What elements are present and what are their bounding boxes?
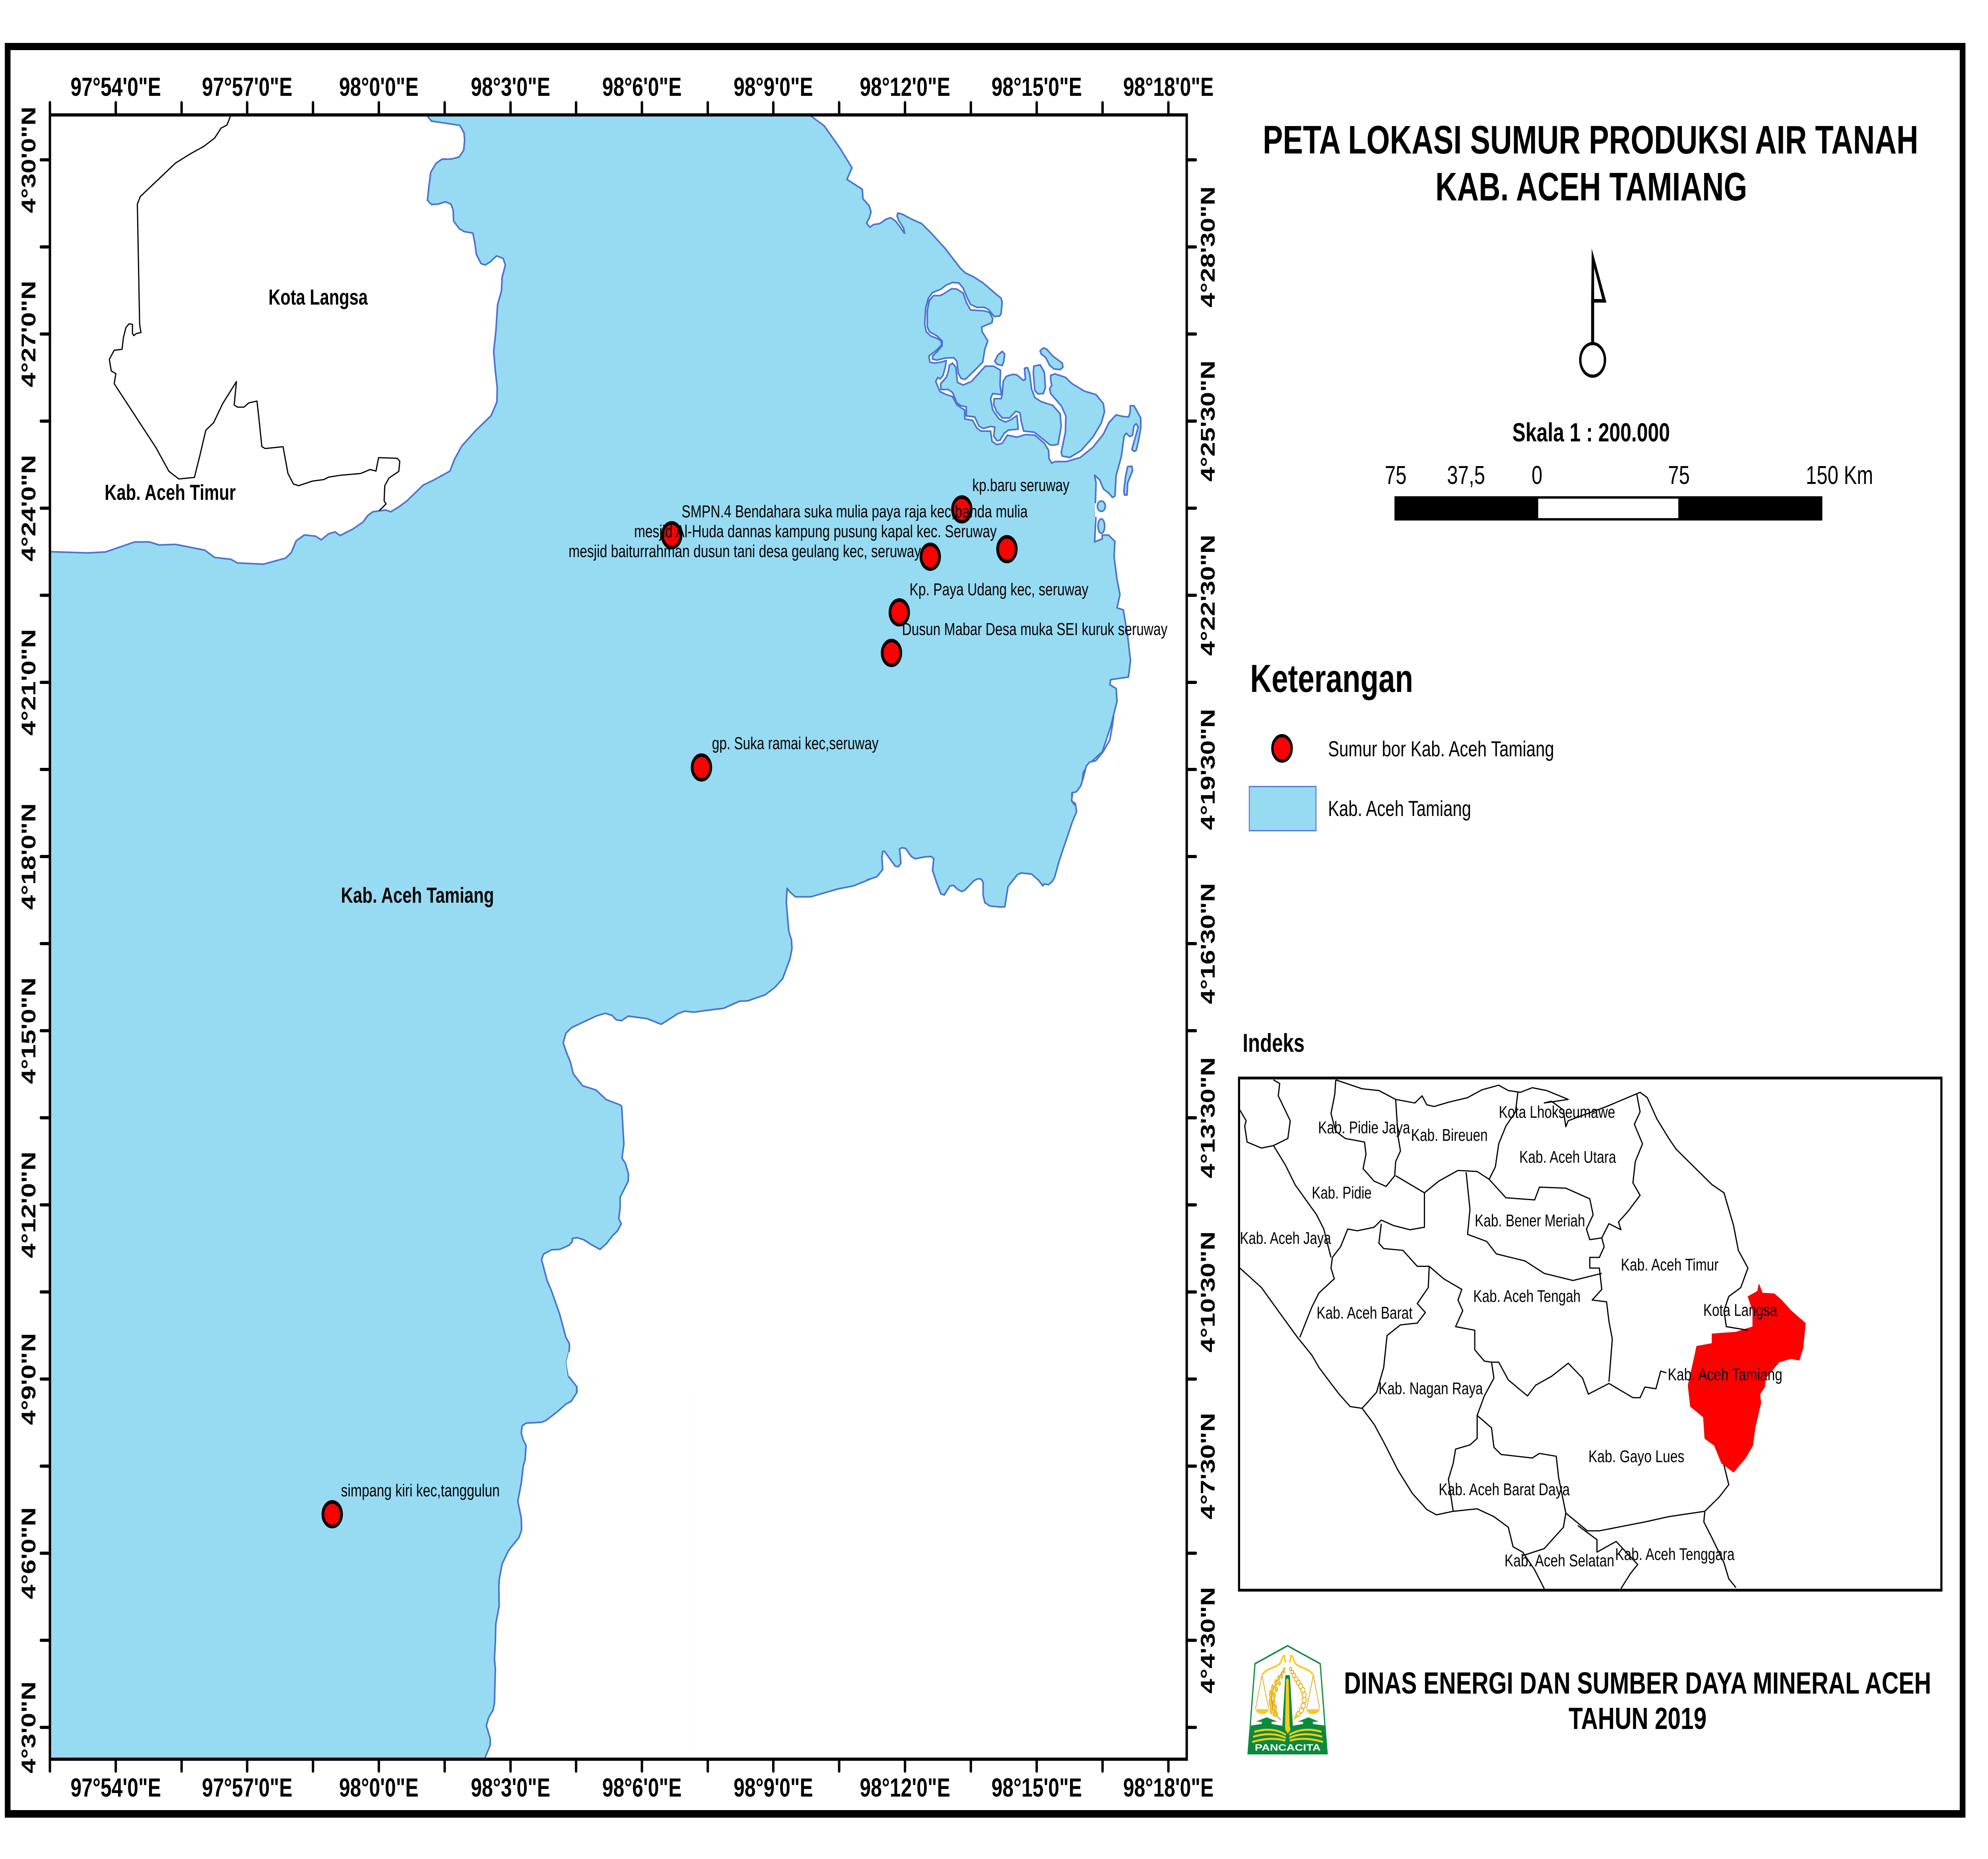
bottom longitude labels: 98°6'0"E (602, 1773, 681, 1803)
inset regency labels: Kab. Aceh Selatan (1505, 1551, 1614, 1570)
right latitude labels: 4°10'30"N (1197, 1232, 1219, 1352)
well point labels (341, 476, 1168, 1500)
inset regency labels: Kab. Aceh Barat Daya (1439, 1480, 1570, 1499)
well point labels: kp.baru seruway (973, 476, 1070, 495)
top longitude labels: 98°0'0"E (339, 72, 419, 102)
top longitude labels: 98°15'0"E (992, 72, 1082, 102)
well point labels: gp. Suka ramai kec,seruway (712, 734, 879, 753)
well point markers (323, 497, 1016, 1527)
top longitude labels: 98°18'0"E (1123, 72, 1213, 102)
title: KAB. ACEH TAMIANG (1435, 165, 1747, 209)
left latitude labels: 4°27'0"N (18, 281, 40, 387)
bottom longitude labels: 98°15'0"E (992, 1773, 1082, 1803)
inset regency labels: Kab. Bener Meriah (1475, 1211, 1585, 1230)
map area: Kab. Aceh Tamiang and surroundings (50, 114, 1188, 1765)
inset regency labels: Kab. Aceh Jaya (1240, 1229, 1331, 1248)
left latitude labels (18, 107, 40, 1774)
top longitude labels: 98°9'0"E (734, 72, 813, 102)
well point labels: simpang kiri kec,tanggulun (341, 1481, 500, 1500)
inset regency labels: Kab. Bireuen (1411, 1126, 1488, 1145)
map region labels: Kab. Aceh Timur (105, 480, 236, 505)
inset regency labels: Kota Langsa (1703, 1301, 1778, 1320)
scale bar: 75 (1668, 461, 1690, 490)
land: Kota Langsa and Kab. Aceh Timur (50, 115, 505, 564)
southwest coast (483, 1352, 691, 1765)
bottom longitude labels: 97°57'0"E (202, 1773, 292, 1803)
right latitude labels: 4°25'30"N (1197, 361, 1219, 482)
left latitude labels: 4°18'0"N (18, 803, 40, 910)
icon: Aceh Pancacita emblem: PANCACITA (1255, 1743, 1321, 1753)
top longitude labels (70, 72, 1213, 102)
inset regency labels: Kab. Nagan Raya (1378, 1379, 1483, 1398)
scale text: Skala 1 : 200.000 (1512, 418, 1670, 447)
inset regency labels: Kota Lhokseumawe (1499, 1103, 1615, 1122)
bottom longitude labels (70, 1773, 1213, 1803)
left latitude labels: 4°12'0"N (18, 1152, 40, 1258)
bottom longitude labels: 98°0'0"E (339, 1773, 419, 1803)
left latitude labels: 4°9'0"N (18, 1333, 40, 1425)
icon: north arrow (1580, 249, 1606, 376)
main map panel (18, 72, 1219, 1803)
southeast coast with inlets (846, 716, 1170, 954)
footer institution text (1344, 1666, 1931, 1736)
scale bar: 150 Km (1806, 461, 1873, 490)
bottom longitude labels: 98°3'0"E (471, 1773, 550, 1803)
well point labels: Kp. Paya Udang kec, seruway (910, 580, 1089, 599)
inset regency labels: Kab. Pidie (1312, 1183, 1372, 1202)
right latitude labels: 4°16'30"N (1197, 883, 1219, 1004)
legend: well symbol: Sumur bor Kab. Aceh Tamiang (1328, 737, 1554, 761)
map neatline and graticule ticks (41, 103, 1196, 1771)
left latitude labels: 4°30'0"N (18, 107, 40, 213)
right latitude labels (1197, 186, 1219, 1694)
left latitude labels: 4°21'0"N (18, 629, 40, 736)
inset regency labels: Kab. Aceh Tamiang (1668, 1365, 1782, 1384)
inset regency labels: Kab. Aceh Timur (1621, 1255, 1719, 1274)
scale bar: 0 (1532, 461, 1542, 490)
bottom longitude labels: 98°9'0"E (734, 1773, 813, 1803)
bottom longitude labels: 98°18'0"E (1123, 1773, 1213, 1803)
right latitude labels: 4°13'30"N (1197, 1057, 1219, 1178)
title: PETA LOKASI SUMUR PRODUKSI AIR TANAH (1263, 118, 1918, 162)
inset regency labels: Kab. Aceh Utara (1519, 1148, 1616, 1167)
scale bar: 37,5 (1447, 461, 1485, 490)
inset regency labels: Kab. Pidie Jaya (1318, 1118, 1410, 1137)
left latitude labels: 4°15'0"N (18, 977, 40, 1084)
scale bar (1385, 461, 1873, 521)
top longitude labels: 97°54'0"E (70, 72, 161, 102)
well point labels: SMPN.4 Bendahara suka mulia paya raja kec,banda mulia (681, 502, 1028, 521)
map region labels: Kab. Aceh Tamiang (341, 883, 494, 907)
inset regency labels: Kab. Aceh Barat (1316, 1303, 1413, 1323)
well point labels: mesjid Al-Huda dannas kampung pusung kapal kec. Seruway (634, 522, 997, 541)
right latitude labels: 4°7'30"N (1197, 1413, 1219, 1519)
inset regency labels: Kab. Aceh Tenggara (1615, 1545, 1735, 1564)
top longitude labels: 98°6'0"E (602, 72, 681, 102)
top longitude labels: 98°3'0"E (471, 72, 550, 102)
map region labels (105, 285, 494, 907)
index heading: Indeks (1242, 1029, 1305, 1058)
inset regency labels: Kab. Gayo Lues (1588, 1447, 1684, 1466)
right latitude labels: 4°19'30"N (1197, 709, 1219, 830)
map region labels: Kota Langsa (268, 285, 368, 309)
legend heading: Keterangan (1250, 657, 1413, 700)
bottom longitude labels: 98°12'0"E (860, 1773, 950, 1803)
right latitude labels: 4°22'30"N (1197, 535, 1219, 656)
inset regency labels (1240, 1103, 1782, 1570)
well point labels: Dusun Mabar Desa muka SEI kuruk seruway (902, 620, 1168, 639)
footer institution text: DINAS ENERGI DAN SUMBER DAYA MINERAL ACEH (1344, 1666, 1931, 1700)
legend: regency area (1249, 787, 1471, 831)
left latitude labels: 4°24'0"N (18, 455, 40, 561)
left latitude labels: 4°3'0"N (18, 1681, 40, 1774)
inset regency labels: Kab. Aceh Tengah (1473, 1287, 1580, 1306)
right latitude labels: 4°4'30"N (1197, 1587, 1219, 1694)
bottom longitude labels: 97°54'0"E (70, 1773, 161, 1803)
footer institution text: TAHUN 2019 (1569, 1702, 1706, 1736)
south central coast (542, 878, 872, 1392)
inset index map (1239, 1078, 1941, 1590)
top longitude labels: 98°12'0"E (860, 72, 950, 102)
left latitude labels: 4°6'0"N (18, 1507, 40, 1599)
right latitude labels: 4°28'30"N (1197, 186, 1219, 307)
east coast (1071, 503, 1186, 806)
icon: Aceh Pancacita emblem (1248, 1646, 1328, 1754)
northeast coast with channels and islands (808, 114, 1188, 517)
well point labels: mesjid baiturrahman dusun tani desa geulang kec, seruway (569, 542, 921, 561)
legend: regency area: Kab. Aceh Tamiang (1328, 796, 1471, 821)
top longitude labels: 97°57'0"E (202, 72, 292, 102)
title (1263, 118, 1918, 209)
scale bar: 75 (1385, 461, 1407, 490)
